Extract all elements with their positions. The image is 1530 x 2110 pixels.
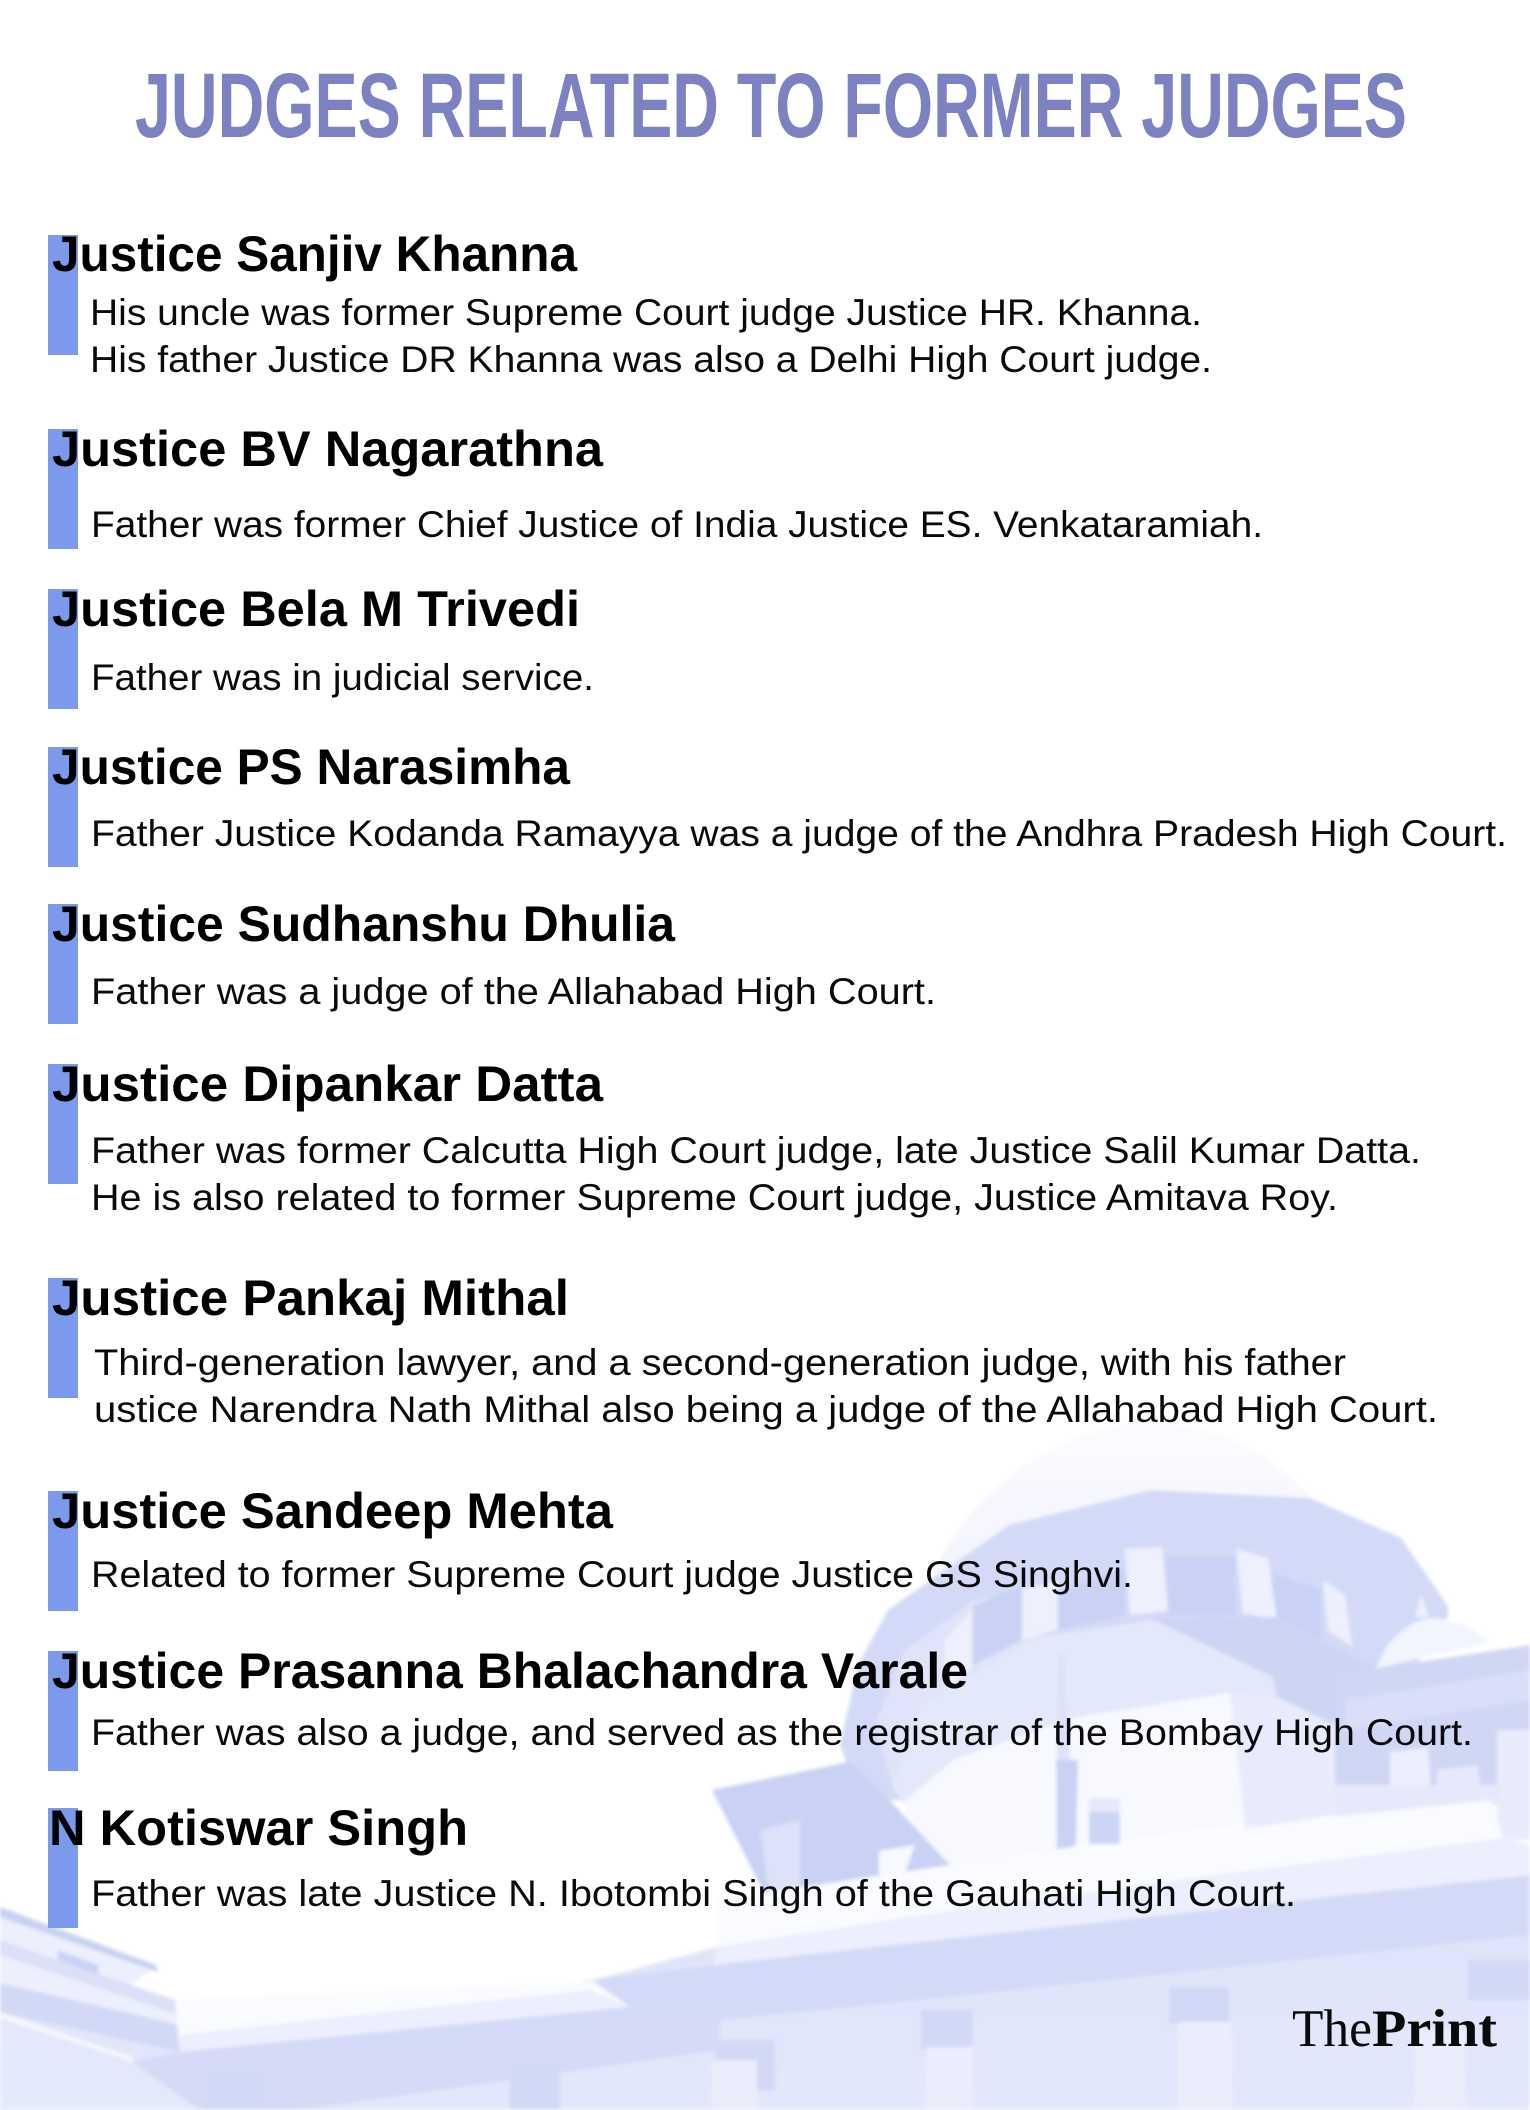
description: He is also related to former Supreme Court judge, Justice Amitava Roy. bbox=[91, 1177, 1338, 1218]
entry: Justice Sudhanshu Dhulia bbox=[48, 896, 936, 1024]
columns bbox=[712, 2022, 1465, 2110]
name: Justice Sanjiv Khanna bbox=[52, 226, 578, 282]
entry: Justice BV Nagarathna bbox=[48, 421, 1263, 549]
logo: ThePrint: Print bbox=[1372, 2000, 1497, 2058]
entry: Justice Dipankar Datta bbox=[48, 1056, 1421, 1218]
entry: Justice Pankaj Mithal bbox=[48, 1270, 1438, 1430]
entry: Justice PS Narasimha bbox=[48, 739, 1507, 867]
accent bar bbox=[48, 1278, 78, 1398]
white cornice: left wing bbox=[175, 1982, 630, 2052]
description: Father was late Justice N. Ibotombi Singh of the Gauhati High Court. bbox=[91, 1873, 1296, 1914]
accent bar bbox=[48, 747, 78, 867]
lower facade bbox=[0, 1845, 1530, 2110]
name: N Kotiswar Singh bbox=[49, 1800, 468, 1856]
accent bar bbox=[48, 1491, 78, 1611]
description: Father was also a judge, and served as the registrar of the Bombay High Court. bbox=[91, 1712, 1473, 1753]
accent bar bbox=[48, 589, 78, 709]
right pale face bbox=[1230, 1693, 1335, 1830]
windows bbox=[973, 1557, 1321, 1665]
window pillars bbox=[945, 1547, 1352, 1690]
name: Justice Dipankar Datta bbox=[52, 1056, 604, 1112]
accent bar bbox=[48, 1064, 78, 1184]
description bbox=[94, 1342, 1438, 1430]
entry: Justice Sanjiv Khanna bbox=[48, 226, 1212, 380]
description: Father Justice Kodanda Ramayya was a judge of the Andhra Pradesh High Court. bbox=[91, 813, 1507, 854]
accent bar bbox=[48, 904, 78, 1024]
entry: N Kotiswar Singh bbox=[48, 1800, 1296, 1928]
entry: Justice Bela M Trivedi bbox=[48, 581, 594, 709]
lower tower block bbox=[893, 1620, 1277, 1803]
description: Related to former Supreme Court judge Justice GS Singhvi. bbox=[91, 1554, 1133, 1595]
description bbox=[90, 292, 1212, 380]
logo: ThePrint bbox=[1292, 2000, 1497, 2058]
accent bar bbox=[48, 1651, 78, 1771]
name: Justice BV Nagarathna bbox=[52, 421, 604, 477]
name: Justice Sudhanshu Dhulia bbox=[52, 896, 676, 952]
description: Father was former Calcutta High Court judge, late Justice Salil Kumar Datta. bbox=[91, 1130, 1421, 1171]
right pavilion bbox=[1335, 1645, 1530, 1790]
small dome bbox=[1377, 1618, 1490, 1668]
description: Father was in judicial service. bbox=[91, 657, 594, 698]
background: Supreme Court building bbox=[0, 1420, 1530, 2110]
description: His uncle was former Supreme Court judge Justice HR. Khanna. bbox=[90, 292, 1202, 333]
name: Justice PS Narasimha bbox=[52, 739, 571, 795]
drum roof bbox=[840, 1490, 1448, 1800]
description: His father Justice DR Khanna was also a Delhi High Court judge. bbox=[90, 339, 1212, 380]
name: Justice Pankaj Mithal bbox=[52, 1270, 569, 1326]
accent bar bbox=[48, 1808, 78, 1928]
entry: Justice Prasanna Bhalachandra Varale bbox=[48, 1643, 1473, 1771]
dark band under windows bbox=[1153, 1617, 1375, 1785]
description: Father was former Chief Justice of India Justice ES. Venkataramiah. bbox=[91, 504, 1263, 545]
name: Justice Bela M Trivedi bbox=[52, 581, 580, 637]
left pavilion bbox=[712, 1762, 950, 1905]
name: Justice Sandeep Mehta bbox=[52, 1483, 614, 1539]
logo: ThePrint: The bbox=[1292, 2000, 1372, 2058]
accent bar bbox=[48, 429, 78, 549]
description bbox=[91, 1130, 1421, 1218]
accent bar bbox=[48, 235, 78, 355]
drum wall left bbox=[875, 1590, 1060, 1787]
small window bbox=[1089, 1798, 1120, 1844]
dome bbox=[925, 1420, 1312, 1620]
entablature band bbox=[180, 1875, 1530, 2072]
description: ustice Narendra Nath Mithal also being a judge of the Allahabad High Court. bbox=[94, 1389, 1438, 1430]
description: Father was a judge of the Allahabad High Court. bbox=[91, 971, 936, 1012]
left wing roof bbox=[0, 1907, 180, 2052]
description: Third-generation lawyer, and a second-generation judge, with his father bbox=[94, 1342, 1346, 1383]
flag pole bbox=[1056, 1653, 1075, 1850]
name: Justice Prasanna Bhalachandra Varale bbox=[52, 1643, 968, 1699]
entry: Justice Sandeep Mehta bbox=[48, 1483, 1133, 1611]
white front face bbox=[903, 1693, 1245, 1865]
white cornice: main bbox=[717, 1800, 1504, 1947]
capitals bbox=[205, 1960, 1530, 2110]
